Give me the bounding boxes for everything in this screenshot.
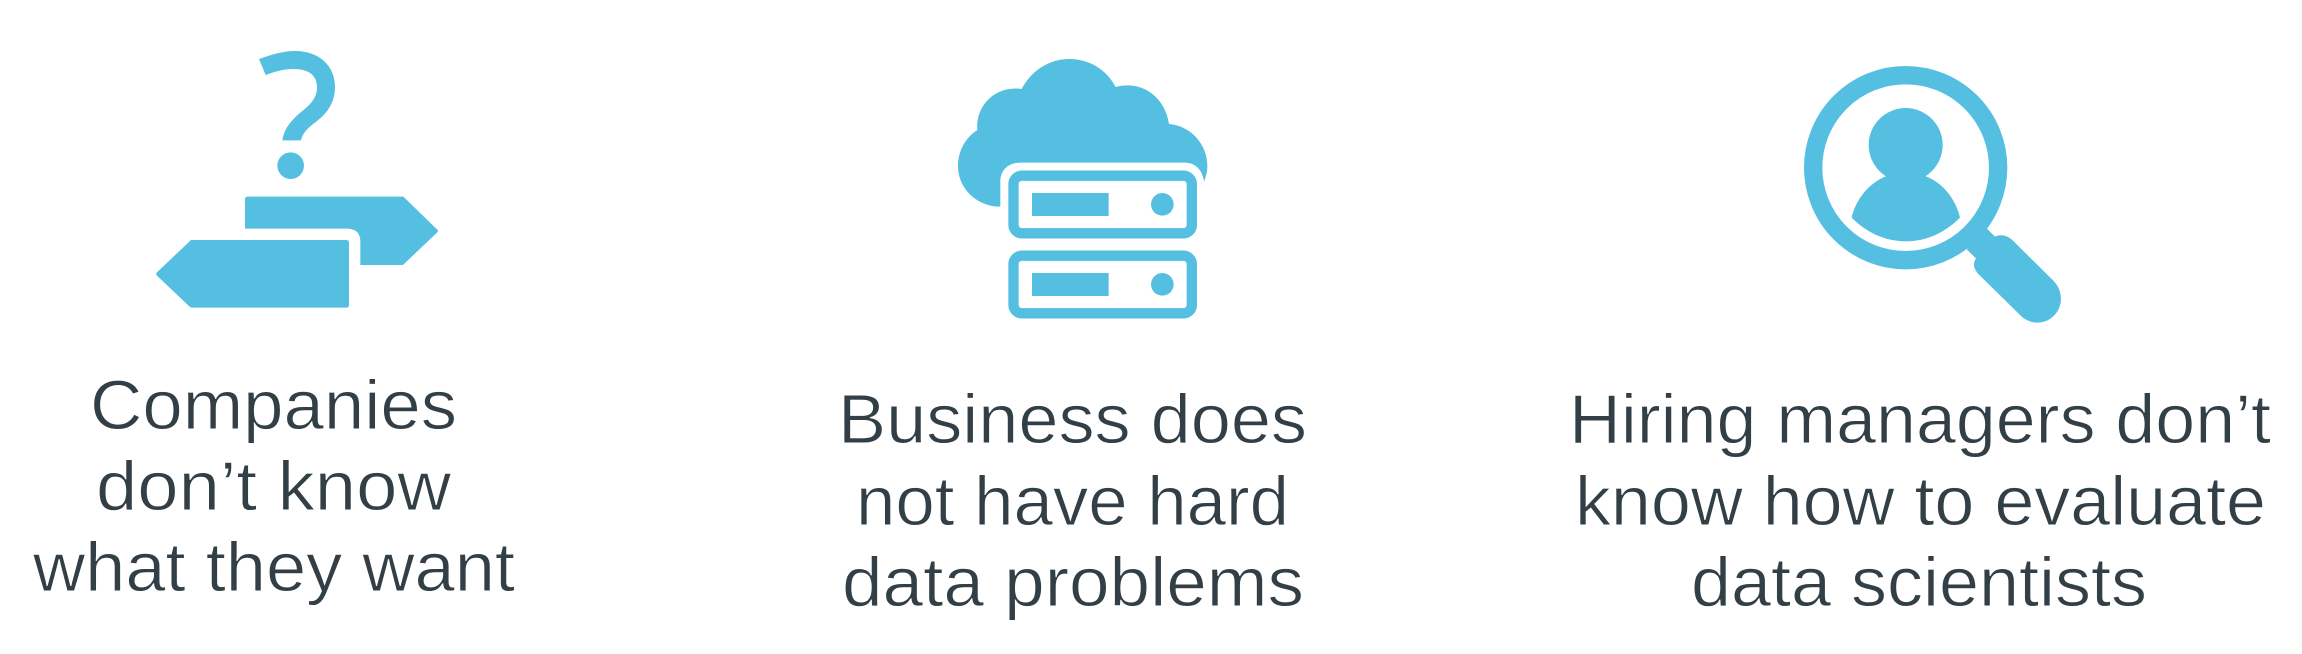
text: hiring managers caption: Hiring managers don’t xyxy=(1569,380,2271,458)
text: business caption: not have hard xyxy=(856,462,1289,540)
text: business caption: data problems xyxy=(842,543,1304,621)
text: hiring managers caption: know how to evaluate xyxy=(1575,462,2266,540)
panel: hiring managers don't know how to evaluate data scientists xyxy=(1569,75,2271,621)
panel: companies don't know what they want xyxy=(32,51,515,606)
text: hiring managers caption: data scientists xyxy=(1691,543,2147,621)
icon: question mark over signposts xyxy=(156,51,438,308)
panel: business does not have hard data problems xyxy=(838,59,1307,621)
icon: magnifying glass over person xyxy=(1813,75,2061,323)
text: business caption: Business does xyxy=(838,380,1307,458)
text: companies caption: Companies xyxy=(90,366,457,444)
text: hiring managers caption xyxy=(1569,380,2271,621)
text: companies caption: what they want xyxy=(32,528,515,606)
text: business caption xyxy=(838,380,1307,621)
text: companies caption xyxy=(32,366,515,606)
text: companies caption: don’t know xyxy=(96,447,451,525)
icon: cloud with servers xyxy=(958,59,1207,313)
